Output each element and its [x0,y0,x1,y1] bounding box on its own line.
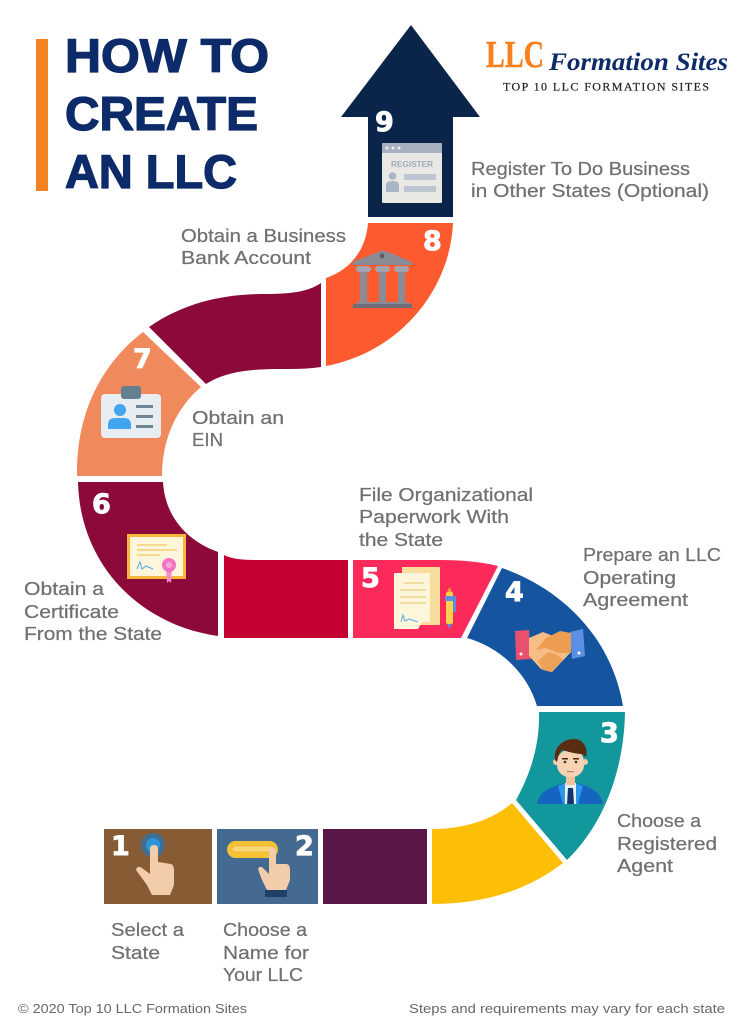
number 6: 6 [92,489,111,520]
icon: register form: REGISTER [391,159,433,169]
label: step 2: Your LLC [223,964,303,985]
title: AN LLC [65,145,237,198]
label: step 3: Registered [617,833,717,854]
label: step 4: Prepare an LLC [583,544,721,565]
label: step 3: Choose a [617,810,702,831]
icon: ID badge [101,386,161,438]
step 5 segment [353,560,498,638]
label: step 3: Agent [617,855,673,876]
icon: touch tap [136,833,174,895]
label: step 5: File Organizational [359,484,533,505]
number 2: 2 [295,831,314,862]
label: step 9 [471,158,709,201]
label: step 1 [111,919,185,963]
logo [486,34,728,94]
icon: certificate [127,534,186,583]
label: step 4: Operating [583,567,676,588]
step 1 block [104,829,212,904]
number 8: 8 [423,226,442,257]
label: step 4: Agreement [583,589,688,610]
label: step 7 [192,407,284,450]
title accent bar [36,39,48,191]
label: step 2 [223,919,309,985]
label: step 2: Name for [223,942,309,963]
step 3 segment [516,712,625,860]
connector yellow segment [432,803,563,904]
connector purple segment [323,829,427,904]
logo: Formation Sites [548,49,728,76]
step 4 segment [467,568,623,706]
label: step 2: Choose a [223,919,308,940]
label: step 6: Certificate [24,601,119,622]
title: HOW TO [65,29,269,82]
step 9 arrow [341,25,480,217]
icon: bank [353,250,412,308]
connector segment between 7 and 8 [149,283,321,384]
connector segment between 5 and 6 [224,555,348,638]
step 2 block [217,829,318,904]
label: step 5: Paperwork With [359,506,509,527]
label: step 8: Obtain a Business [181,225,346,246]
icon: register form [382,143,442,203]
step 7 segment [77,332,201,476]
logo: TOP 10 LLC FORMATION SITES [503,80,709,94]
title [65,29,269,198]
label: step 9: in Other States (Optional) [471,180,709,201]
label: step 8 [181,225,346,268]
step 6 segment [78,482,218,636]
label: step 5 [359,484,533,550]
label: step 6 [24,578,162,644]
number 3: 3 [600,718,619,749]
label: step 6: From the State [24,623,162,644]
label: step 9: Register To Do Business [471,158,690,179]
number 1: 1 [111,831,130,862]
number 5: 5 [361,563,380,594]
footer: disclaimer: Steps and requirements may vary for each state [409,1001,725,1016]
label: step 5: the State [359,529,443,550]
icon: handshake [515,629,585,672]
label: step 4 [583,544,721,610]
number 7: 7 [133,344,152,375]
icon: tapping name field [227,841,290,897]
title: CREATE [65,87,258,140]
logo: LLC [486,34,544,76]
step 8 segment [326,223,453,366]
icon: businessman [537,739,603,804]
label: step 3 [617,810,717,876]
label: step 1: Select a [111,919,185,940]
number 9: 9 [375,107,394,138]
label: step 6: Obtain a [24,578,105,599]
icon: documents and pen [394,567,456,629]
label: step 7: EIN [192,429,223,450]
label: step 1: State [111,942,160,963]
footer: copyright: © 2020 Top 10 LLC Formation Sites [18,1001,248,1016]
number 4: 4 [505,577,524,608]
label: step 7: Obtain an [192,407,284,428]
label: step 8: Bank Account [181,247,311,268]
